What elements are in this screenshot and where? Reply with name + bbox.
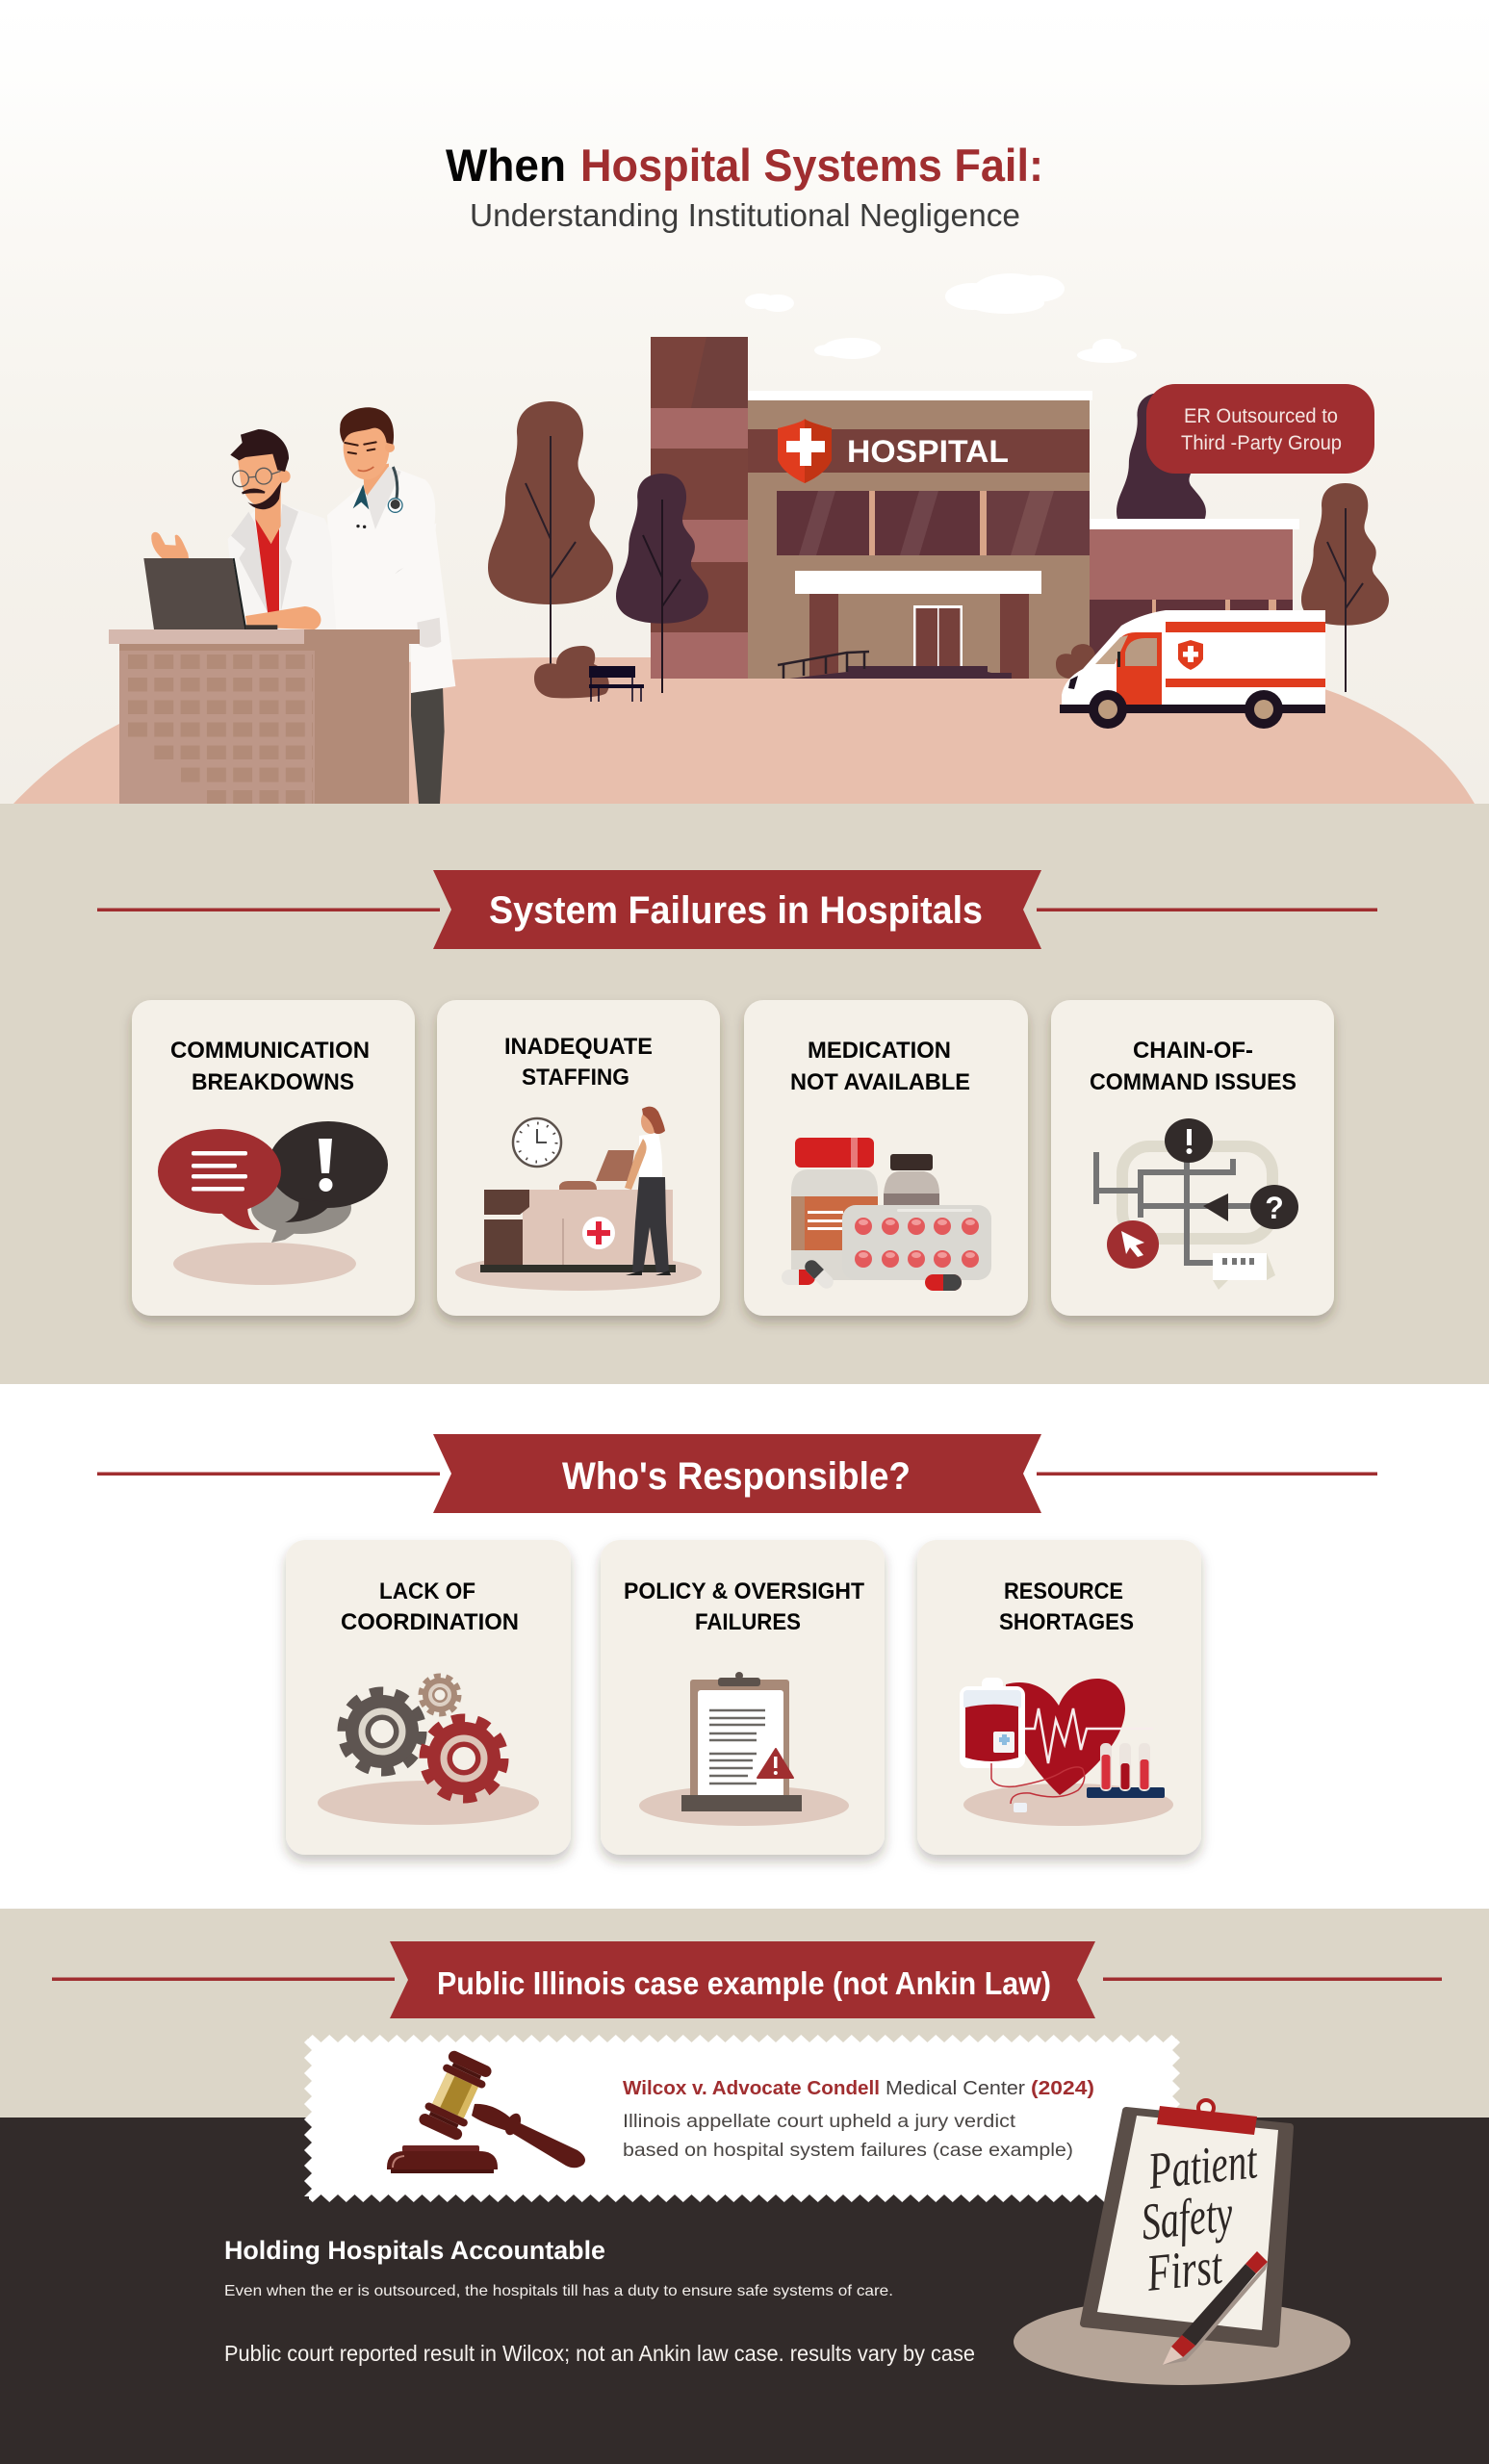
panel: lack of coordination: LACK OF xyxy=(379,1578,475,1604)
panel: inadequate staffing: INADEQUATE xyxy=(504,1034,653,1060)
icon: heart and blood bag xyxy=(960,1678,1173,1826)
panel: policy and oversight failures: FAILURES xyxy=(695,1609,801,1635)
panel: resource shortages: RESOURCE xyxy=(1004,1578,1123,1604)
hospital main building xyxy=(748,391,1092,679)
case text: based on hospital system failures (case example) xyxy=(623,2141,1073,2161)
callout: ER outsourced xyxy=(1146,384,1374,474)
callout: ER outsourced: ER Outsourced to xyxy=(1184,405,1338,427)
bush and bench xyxy=(534,646,644,702)
tree: dark purple xyxy=(616,474,708,693)
back tree behind wing xyxy=(1117,393,1206,538)
side wing xyxy=(1090,519,1299,679)
panel: communication breakdowns: BREAKDOWNS xyxy=(192,1069,354,1095)
panel: policy and oversight failures xyxy=(601,1540,885,1855)
desk xyxy=(109,629,420,804)
illustration: patient safety first clipboard xyxy=(1014,2100,1350,2385)
panel: inadequate staffing: STAFFING xyxy=(522,1065,629,1091)
tree: right brown xyxy=(1301,483,1389,692)
panel: chain-of-command issues xyxy=(1051,1000,1334,1316)
tree: large brown xyxy=(488,401,613,668)
case text: (2024) xyxy=(1031,2078,1094,2099)
panel: medication not available xyxy=(744,1000,1028,1316)
panel: chain-of-command issues: COMMAND ISSUES xyxy=(1090,1069,1296,1095)
banner: System Failures in Hospitals: System Failures in Hospitals xyxy=(489,889,983,932)
banner: Who's Responsible: Who's Responsible? xyxy=(562,1455,911,1498)
icon: gears xyxy=(318,1676,539,1825)
icon: flowchart: ? xyxy=(1265,1191,1284,1225)
ambulance xyxy=(1060,610,1325,729)
title xyxy=(446,140,1043,233)
icon: gavel xyxy=(387,2049,585,2173)
case text xyxy=(623,2078,1094,2161)
icon: flowchart xyxy=(1096,1118,1298,1290)
panel: policy and oversight failures: POLICY & OVERSIGHT xyxy=(624,1578,864,1604)
icon: pencil xyxy=(1163,2251,1268,2365)
banner: Public Illinois case example xyxy=(52,1941,1442,2018)
clipboard script text: Patient xyxy=(1144,2131,1261,2200)
hospital sign shield xyxy=(778,419,832,483)
stair rail xyxy=(778,652,869,679)
accountability text: Even when the er is outsourced, the hospitals till has a duty to ensure safe systems of care. xyxy=(224,2283,893,2299)
panel: lack of coordination xyxy=(286,1540,571,1855)
hospital tower xyxy=(651,337,748,679)
icon: speech bubbles xyxy=(158,1121,388,1285)
doctor with glasses xyxy=(143,429,336,630)
icon: medicine bottles and pills xyxy=(782,1138,991,1292)
panel: medication not available: MEDICATION xyxy=(808,1038,951,1064)
panel: resource shortages xyxy=(917,1540,1201,1855)
case text: Illinois appellate court upheld a jury verdict xyxy=(623,2112,1016,2132)
clipboard script text: Safety xyxy=(1139,2184,1236,2251)
case text: Medical Center xyxy=(886,2078,1025,2099)
hero illustration: hospital scene xyxy=(13,273,1475,804)
panel: inadequate staffing xyxy=(437,1000,720,1316)
ground hill xyxy=(13,657,1475,804)
panel: case example ticket xyxy=(304,2035,1180,2202)
clipboard script text xyxy=(1139,2131,1261,2302)
hospital sign text: HOSPITAL xyxy=(847,434,1009,469)
banner: System Failures in Hospitals xyxy=(97,870,1377,949)
laptop xyxy=(143,558,245,629)
accountability text: Public court reported result in Wilcox; not an Ankin law case. results vary by case xyxy=(224,2341,975,2366)
banner: Who's Responsible xyxy=(97,1434,1377,1513)
panel: communication breakdowns xyxy=(132,1000,415,1316)
case text: Wilcox v. Advocate Condell xyxy=(623,2078,880,2099)
title: Understanding Institutional Negligence xyxy=(470,197,1020,233)
clipboard script text: First xyxy=(1143,2237,1226,2302)
panel: communication breakdowns: COMMUNICATION xyxy=(170,1038,370,1064)
panel: resource shortages: SHORTAGES xyxy=(999,1609,1134,1635)
doctor with stethoscope xyxy=(292,407,455,804)
accountability text xyxy=(224,2236,975,2366)
callout: ER outsourced: Third -Party Group xyxy=(1181,432,1342,454)
panel: lack of coordination: COORDINATION xyxy=(341,1609,519,1635)
small bush by ambulance xyxy=(1056,644,1095,679)
title: Hospital Systems Fail: xyxy=(580,140,1043,191)
title: When xyxy=(446,140,566,191)
accountability text: Holding Hospitals Accountable xyxy=(224,2236,605,2265)
panel: chain-of-command issues: CHAIN-OF- xyxy=(1133,1038,1253,1064)
icon: clipboard with warning xyxy=(639,1672,849,1826)
entrance door xyxy=(913,605,963,666)
capsules xyxy=(782,1257,962,1292)
banner: Public Illinois case example: Public Illinois case example (not Ankin Law) xyxy=(437,1965,1051,2001)
icon: reception desk and nurse xyxy=(455,1107,702,1291)
panel: medication not available: NOT AVAILABLE xyxy=(790,1069,970,1095)
clouds xyxy=(745,273,1137,363)
nurse figure xyxy=(625,1107,671,1275)
